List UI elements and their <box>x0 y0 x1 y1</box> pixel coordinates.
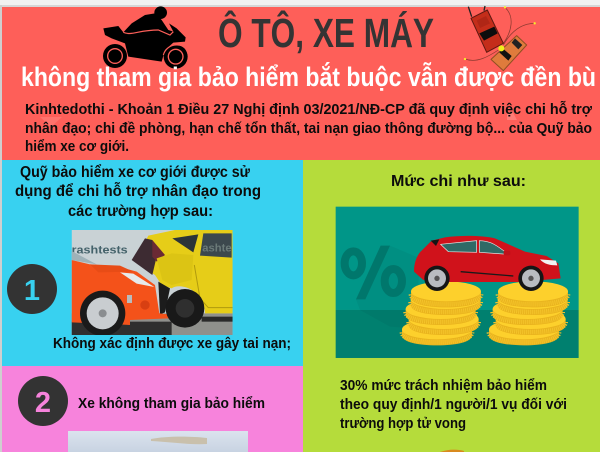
intro text: hiểm xe cơ giới. <box>25 138 129 155</box>
illustration: car on coin stacks <box>336 207 579 358</box>
cyan panel heading: các trường hợp sau: <box>68 203 213 220</box>
photo: second case <box>68 431 248 452</box>
cyan panel heading: Quỹ bảo hiểm xe cơ giới được sử <box>20 163 250 181</box>
cyan panel heading <box>15 163 261 220</box>
intro text <box>25 101 592 155</box>
green panel heading: Mức chi như sau: <box>391 173 526 190</box>
panel: pink cases <box>2 366 303 452</box>
caption 2: Xe không tham gia bảo hiểm <box>78 395 265 412</box>
cyan panel heading: dụng để chi hỗ trợ nhân đạo trong <box>15 181 261 200</box>
icon: motorcycle <box>103 6 189 69</box>
amount text: trường hợp tử vong <box>340 415 466 432</box>
amount text: theo quy định/1 người/1 vụ đối với <box>340 396 567 413</box>
photo: crashed orange and yellow cars: ashte <box>202 243 232 255</box>
photo: crashed orange and yellow cars <box>72 230 233 336</box>
amount text: 30% mức trách nhiệm bảo hiểm <box>340 377 547 394</box>
number badge 2 <box>18 376 68 426</box>
panel: green amounts <box>303 160 600 452</box>
red car <box>414 236 561 291</box>
number badge 2: 2 <box>35 387 51 419</box>
panel: cyan cases <box>2 160 303 366</box>
panel: header <box>2 6 600 160</box>
intro text: Kinhtedothi - Khoản 1 Điều 27 Nghị định 03/2021/NĐ-CP đã quy định việc chi hỗ trợ <box>25 101 592 118</box>
title: Ô TÔ, XE MÁY <box>218 10 434 56</box>
percent sign <box>345 246 420 328</box>
amount text <box>340 377 567 432</box>
photo: crashed orange and yellow cars: rashtests <box>72 244 128 256</box>
icon: partial orange shape at bottom <box>440 450 464 452</box>
number badge 1: 1 <box>24 275 40 307</box>
caption 1: Không xác định được xe gây tai nạn; <box>53 335 291 352</box>
number badge 1 <box>7 264 57 314</box>
icon: crashed cars <box>464 6 536 71</box>
